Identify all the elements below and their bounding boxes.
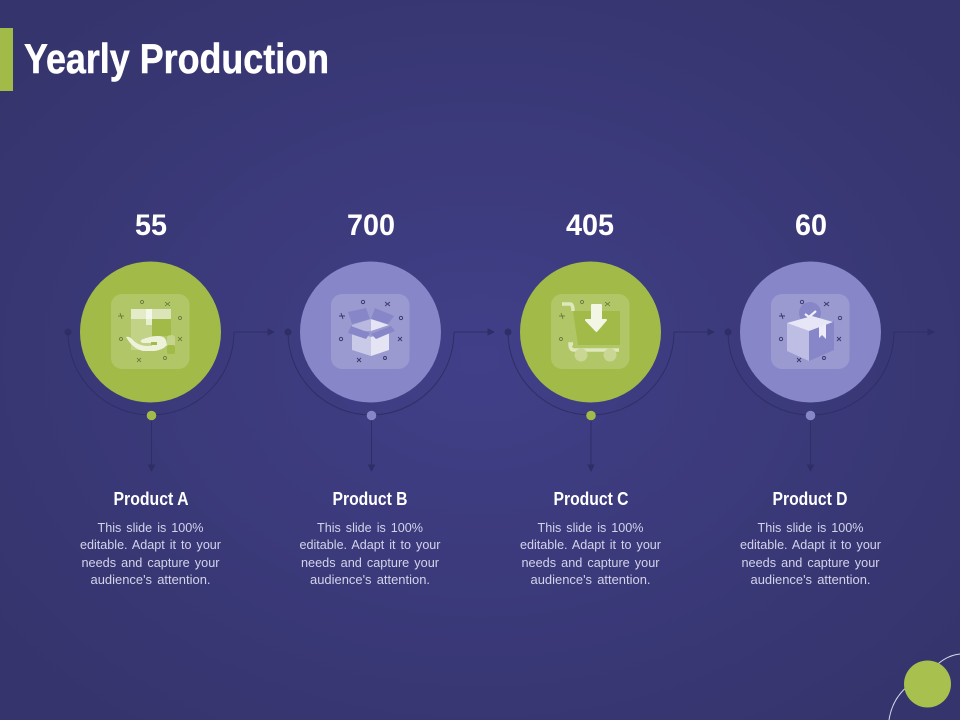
description A: This slide is 100% — [98, 521, 204, 535]
connector C — [504, 328, 714, 471]
node dot A — [147, 411, 156, 420]
description D: needs and capture your — [742, 556, 880, 570]
description B: needs and capture your — [301, 556, 439, 570]
connector D — [724, 328, 934, 471]
circle B — [300, 262, 441, 402]
icon: shopping cart — [551, 294, 630, 369]
icon: box with check badge — [771, 294, 850, 369]
value: 55: 55 — [135, 209, 167, 242]
description D: editable. Adapt it to your — [740, 538, 881, 552]
node dot D — [806, 411, 815, 420]
description A: editable. Adapt it to your — [80, 538, 221, 552]
description C: audience's attention. — [530, 573, 650, 587]
description C: needs and capture your — [522, 556, 660, 570]
value: 700: 700 — [347, 209, 395, 242]
description D: audience's attention. — [750, 573, 870, 587]
heading: Product A: Product A — [114, 489, 188, 509]
circle A — [80, 262, 221, 402]
connector A — [64, 328, 274, 471]
description C — [520, 521, 661, 587]
value: 405: 405 — [566, 209, 614, 242]
description B: editable. Adapt it to your — [300, 538, 440, 552]
icon: open box — [331, 294, 410, 369]
circle C — [520, 262, 661, 402]
description D: This slide is 100% — [758, 521, 864, 535]
title: Yearly Production — [24, 35, 329, 82]
description C: editable. Adapt it to your — [520, 538, 661, 552]
description C: This slide is 100% — [538, 521, 644, 535]
decorative corner circle — [889, 654, 960, 720]
description A — [80, 521, 221, 587]
description B — [300, 521, 440, 587]
description A: audience's attention. — [90, 573, 210, 587]
description D — [740, 521, 881, 587]
heading: Product C: Product C — [554, 489, 628, 509]
description B: This slide is 100% — [317, 521, 423, 535]
node dot B — [367, 411, 376, 420]
title accent bar — [0, 28, 13, 91]
circle D — [740, 262, 881, 402]
heading: Product B: Product B — [332, 489, 408, 509]
connector B — [284, 328, 494, 471]
description B: audience's attention. — [310, 573, 430, 587]
value: 60: 60 — [795, 209, 827, 242]
icon: hand holding package — [111, 294, 190, 369]
node dot C — [586, 411, 596, 420]
heading: Product D: Product D — [772, 489, 848, 509]
description A: needs and capture your — [82, 556, 220, 570]
